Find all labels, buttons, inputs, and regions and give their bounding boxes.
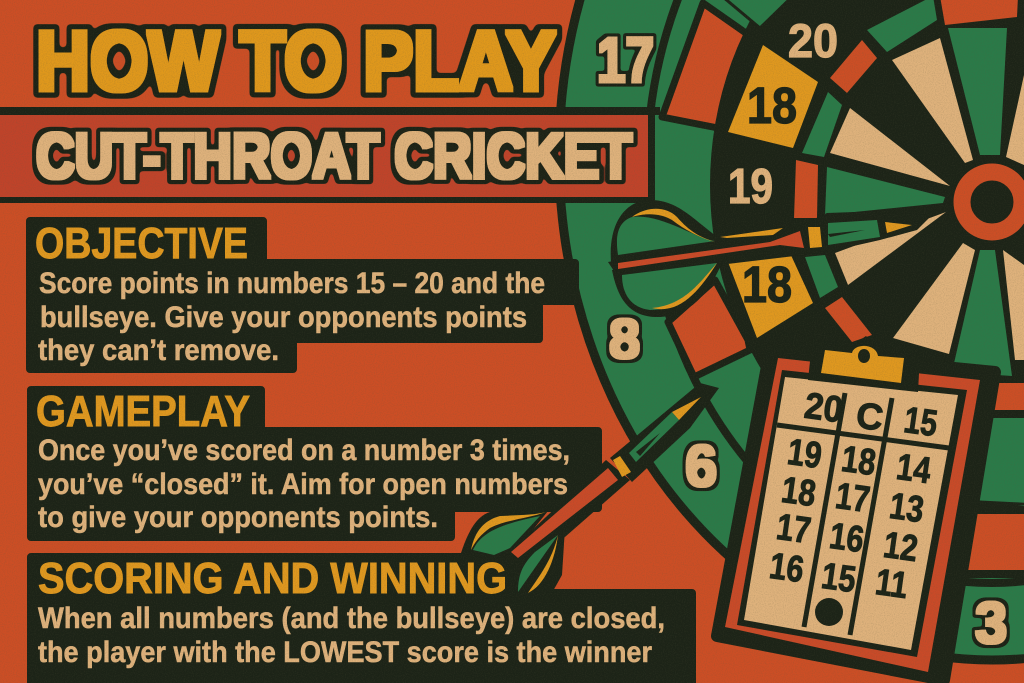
- clipboard: 18: [779, 469, 818, 514]
- clipboard: 16: [767, 545, 806, 590]
- treble: green upper: [802, 92, 842, 157]
- clipboard: 13: [887, 485, 926, 530]
- outer green band: [559, 0, 1024, 660]
- panel: gameplay: to give your opponents points.: [38, 501, 438, 534]
- clipboard: 17: [833, 475, 872, 520]
- red board: [725, 358, 980, 672]
- wedge: tan: [830, 108, 950, 186]
- dart body outline: [608, 210, 930, 277]
- banner top rule: [0, 107, 660, 115]
- clip outline: [808, 336, 920, 392]
- column three: 14: [894, 446, 934, 491]
- clipboard: C: [854, 394, 886, 439]
- wedge: tan right: [1006, 75, 1024, 165]
- board number 6: 6: [685, 434, 717, 499]
- board number 8: 8: [609, 307, 640, 370]
- inner wedges: [825, 28, 1024, 376]
- amber sliver: [720, 228, 783, 238]
- clipboard: 16: [827, 515, 866, 560]
- panel: objective: bullseye. Give your opponents points: [40, 301, 527, 334]
- bullseye mark: [815, 598, 843, 626]
- black number band: [710, 0, 1024, 507]
- upper flight amber: [632, 209, 715, 242]
- treble: red left: [794, 160, 818, 218]
- left flight outline: [461, 506, 552, 560]
- body text: Once you’ve scored on a number 3 times,: [38, 434, 570, 467]
- dart in the board: [608, 200, 930, 317]
- clipboard: 11: [873, 561, 910, 606]
- right flight amber: [528, 535, 558, 593]
- clip: [821, 346, 904, 383]
- barrel slit: [636, 433, 660, 456]
- clipboard: 17: [774, 506, 813, 551]
- table lines: [777, 393, 949, 635]
- heading: OBJECTIVE: [35, 219, 248, 268]
- second ring: [647, 0, 1024, 583]
- treble: red bottom: [987, 383, 1024, 410]
- upper flight outline: [611, 200, 722, 262]
- board number 18 lower: 18: [742, 256, 792, 313]
- treble: red upper: [830, 40, 877, 93]
- ring segment: lower red: [668, 280, 750, 377]
- lower flight outline: [612, 258, 724, 317]
- treble: red lower: [825, 297, 872, 342]
- banner bottom rule: [0, 197, 655, 203]
- upper flight green: [617, 217, 715, 255]
- wedge: tan top: [892, 38, 973, 163]
- clip hole: [858, 349, 870, 363]
- clipboard: 15: [902, 399, 940, 444]
- title: how to play: HOW TO PLAY: [36, 14, 556, 108]
- nose: [885, 222, 912, 233]
- panel background: [31, 390, 598, 537]
- panel: scoring and winning: the player with the LOWEST score is the winner: [38, 636, 652, 669]
- wedge: green: [825, 167, 945, 215]
- panel: scoring and winning: [31, 554, 692, 683]
- treble: green lower: [805, 255, 838, 298]
- title banner: [0, 107, 660, 203]
- heading: GAMEPLAY: [36, 387, 250, 436]
- ring segment: upper red: [662, 3, 753, 128]
- band: [808, 227, 822, 248]
- left flight green: [473, 516, 540, 555]
- shaft: [511, 468, 618, 558]
- banner band: [0, 115, 648, 197]
- barrel outline: [610, 383, 719, 482]
- board number 3: 3: [975, 591, 1007, 656]
- wedge: green top: [948, 28, 1007, 155]
- paper: [744, 377, 958, 650]
- board backing: [717, 350, 995, 680]
- panel: objective: [30, 219, 575, 369]
- wedge: tan bottom right: [1003, 250, 1024, 360]
- board number 17: 17: [597, 24, 654, 96]
- nose: [672, 397, 701, 420]
- number band: amber 18 upper: [728, 45, 818, 148]
- wedge: tan below dart: [835, 212, 946, 285]
- subtitle: cut-throat cricket: CUT-THROAT CRICKET: [36, 120, 632, 192]
- board number 18 upper: 18: [747, 77, 797, 134]
- right flight outline: [510, 528, 565, 600]
- panel background: [31, 557, 692, 683]
- inner frame: [737, 370, 967, 657]
- wedge: green bottom: [952, 250, 1012, 376]
- clipboard: 15: [819, 555, 858, 600]
- clipboard: [717, 336, 995, 680]
- body text: When all numbers (and the bullseye) are closed,: [38, 602, 665, 635]
- panel: gameplay: you’ve “closed” it. Aim for open numbers: [38, 468, 568, 501]
- barrel slit: [828, 230, 865, 237]
- ring segment: bottom red: [955, 510, 1024, 574]
- lower flight green: [622, 263, 717, 310]
- column two: 18: [839, 438, 878, 483]
- bullseye: [962, 172, 1022, 232]
- dartboard: [559, 0, 1024, 660]
- ring segment: top green: [717, 0, 797, 28]
- column one: 19: [785, 431, 824, 476]
- barrel: [828, 220, 880, 245]
- treble: red top: [940, 0, 1018, 25]
- barrel: [629, 412, 679, 462]
- panel: objective: they can’t remove.: [38, 334, 279, 367]
- shaft: [618, 231, 804, 269]
- body text: Score points in numbers 15 – 20 and the: [39, 267, 545, 300]
- lower flight amber: [652, 263, 717, 309]
- band: [613, 456, 631, 477]
- left flight amber: [471, 512, 546, 550]
- number band: amber 18 lower: [728, 253, 813, 338]
- number band: bottom green: [970, 418, 1024, 503]
- banner right edge: [648, 107, 655, 203]
- panel: gameplay: [31, 387, 598, 537]
- panel background: [30, 221, 575, 369]
- treble: green top: [867, 0, 937, 52]
- board number 20: 20: [788, 14, 838, 67]
- shaft outline: [508, 460, 630, 572]
- clipboard: 12: [881, 524, 920, 569]
- wedge: tan bottom: [893, 243, 975, 354]
- dart in the air: [461, 383, 719, 600]
- header numbers: 20: [802, 385, 845, 431]
- board number 19: 19: [728, 160, 773, 214]
- heading: SCORING AND WINNING: [38, 554, 507, 603]
- right flight green: [518, 535, 558, 592]
